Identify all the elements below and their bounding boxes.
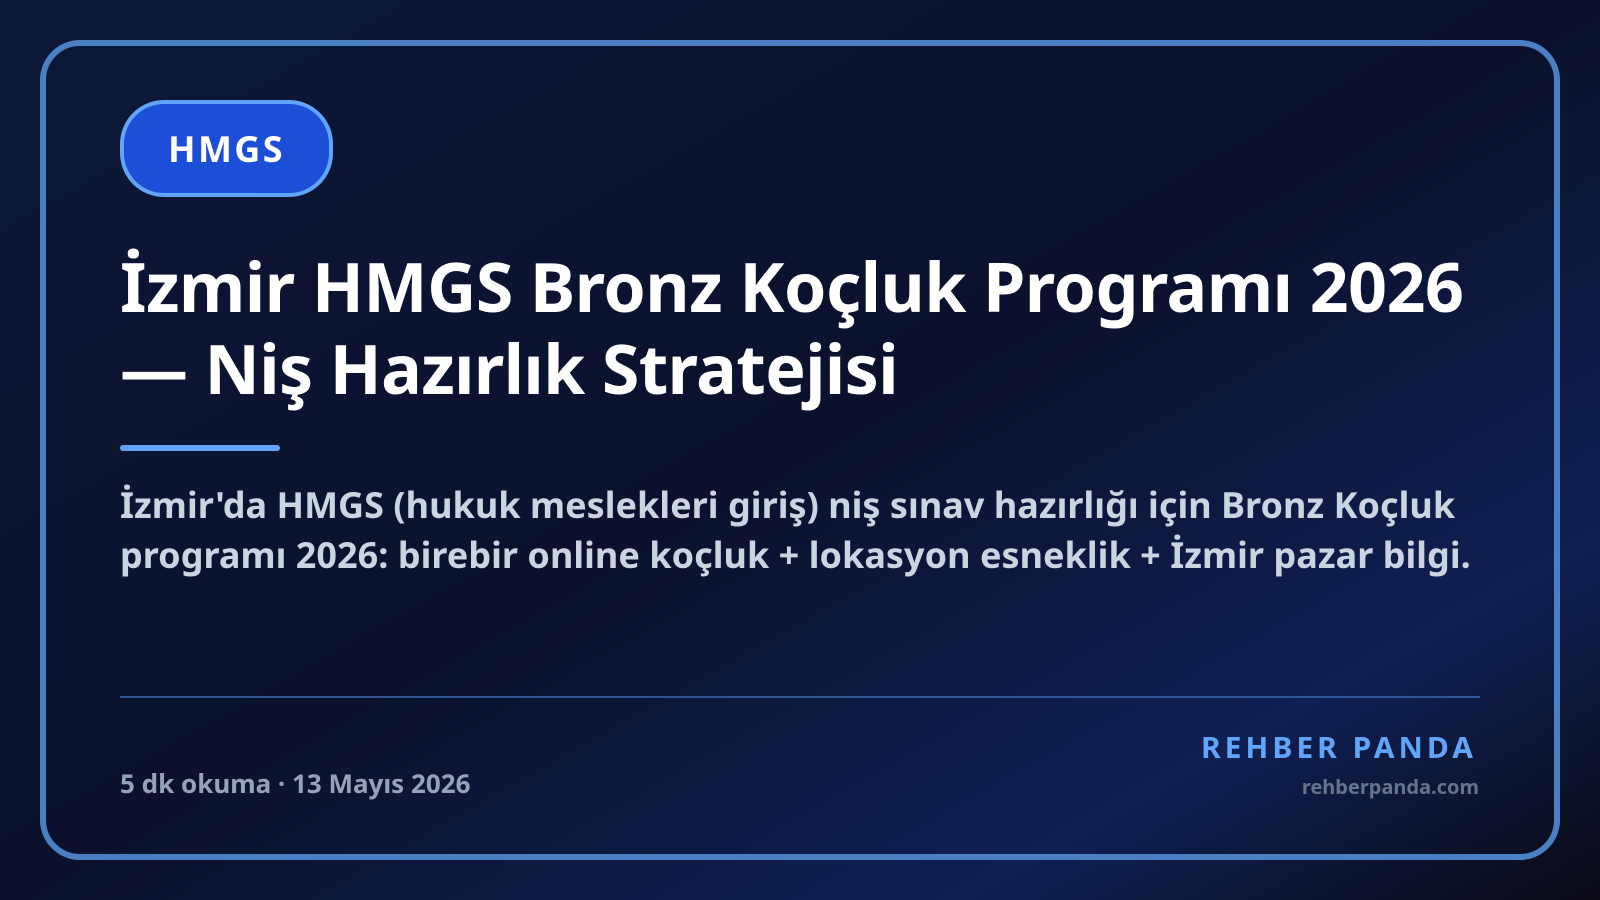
title: — Niş Hazırlık Stratejisi [120,321,898,414]
category badge: HMGS: HMGS [168,124,285,173]
subtitle: İzmir'da HMGS (hukuk meslekleri giriş) niş sınav hazırlığı için Bronz Koçluk [120,480,1455,529]
title: İzmir HMGS Bronz Koçluk Programı 2026 [120,239,1463,332]
subtitle [120,480,1471,579]
subtitle: programı 2026: birebir online koçluk + lokasyon esneklik + İzmir pazar bilgi. [120,530,1471,579]
brand url: rehberpanda.com [1302,773,1479,800]
footer divider [120,696,1480,698]
title [120,239,1463,414]
brand name: REHBER PANDA [1201,726,1477,767]
accent rule [120,445,280,451]
category badge: HMGS [120,100,333,197]
reading time and date: 5 dk okuma · 13 Mayıs 2026 [120,765,470,801]
